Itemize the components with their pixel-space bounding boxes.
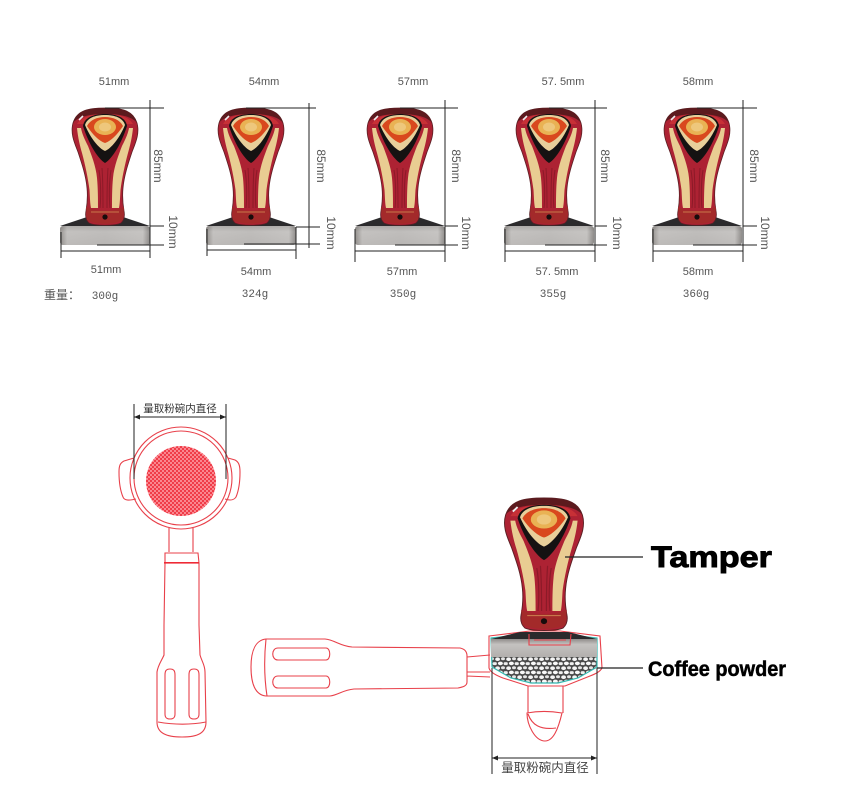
tamper in basket xyxy=(491,498,597,657)
tamper 57mm: 57mm xyxy=(398,76,428,88)
tamper 51mm: 85mm xyxy=(151,149,165,183)
icon: portafilter head and filter xyxy=(119,427,240,552)
dimension: bowl inner diameter xyxy=(134,402,226,479)
tamper 57.5mm xyxy=(504,76,624,301)
tamper 51mm: 51mm xyxy=(99,76,129,88)
portafilter top view xyxy=(119,402,240,737)
dimension: bowl inner diameter xyxy=(492,668,597,775)
tamper 54mm: 10mm xyxy=(324,216,338,250)
tamper 54mm: 85mm xyxy=(314,149,328,183)
icon: coffee powder xyxy=(492,657,597,683)
icon: portafilter handle horizontal xyxy=(251,639,490,696)
tamper 58mm: 58mm xyxy=(683,76,713,88)
tamper 57mm xyxy=(355,76,473,301)
panel: size comparison of five tampers xyxy=(44,76,772,303)
tamper 58mm: 360g xyxy=(683,289,709,301)
tamper 51mm: 51mm xyxy=(91,264,121,276)
tamper 57.5mm: 85mm xyxy=(598,149,612,183)
tamper 54mm xyxy=(206,76,338,301)
icon: portafilter handle vertical xyxy=(157,553,206,737)
tamper 58mm xyxy=(652,76,772,301)
tamper 58mm: 85mm xyxy=(747,149,761,183)
tamper 51mm xyxy=(44,76,180,303)
callout: Tamper: Tamper xyxy=(651,541,772,574)
tamper 54mm: 54mm xyxy=(249,76,279,88)
icon: basket outline xyxy=(489,631,602,741)
callout: Coffee powder: Coffee powder xyxy=(648,658,786,681)
dimension: bowl inner diameter: 量取粉碗内直径 xyxy=(501,760,589,775)
tamper 57mm: 85mm xyxy=(449,149,463,183)
tamper 54mm: 324g xyxy=(242,289,268,301)
dimension: bowl inner diameter: 量取粉碗内直径 xyxy=(143,402,217,415)
tamper 54mm: 54mm xyxy=(241,266,271,278)
tamper 57.5mm: 10mm xyxy=(610,216,624,250)
tamper 51mm: 10mm xyxy=(166,215,180,249)
tamper 58mm: 10mm xyxy=(758,216,772,250)
tamper 51mm: 300g xyxy=(92,291,118,303)
tamper 51mm: 重量： xyxy=(44,288,80,303)
tamper 57.5mm: 57. 5mm xyxy=(542,76,584,88)
portafilter side view with tamper xyxy=(251,498,786,775)
tamper 57mm: 350g xyxy=(390,289,416,301)
tamper 58mm: 58mm xyxy=(683,266,713,278)
tamper 57.5mm: 57. 5mm xyxy=(536,266,578,278)
tamper 57mm: 57mm xyxy=(387,266,417,278)
tamper 57.5mm: 355g xyxy=(540,289,566,301)
tamper 57mm: 10mm xyxy=(459,216,473,250)
